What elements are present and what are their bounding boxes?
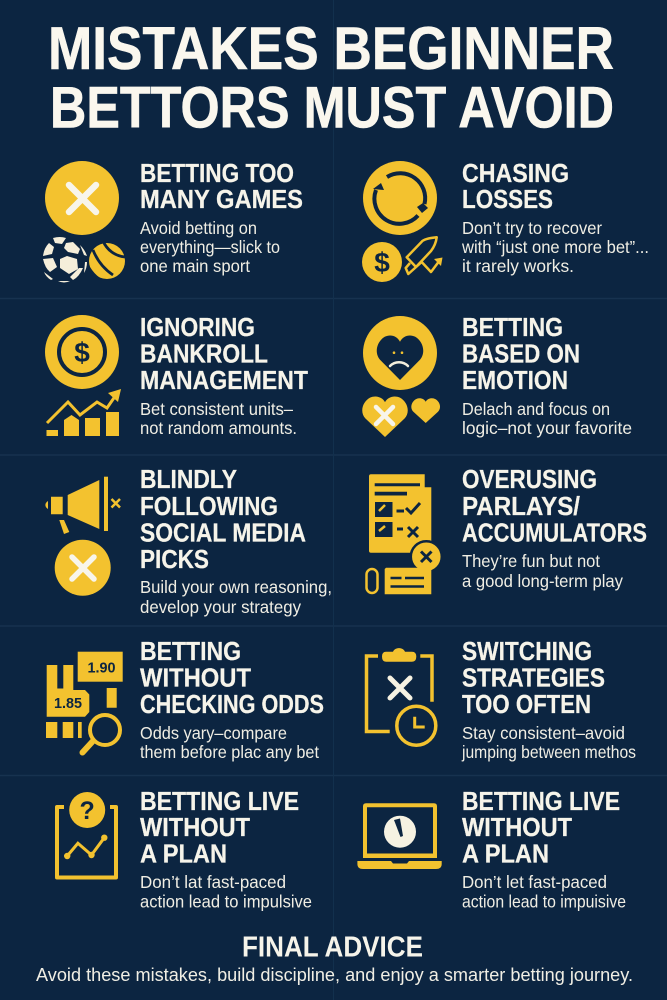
title — [48, 15, 614, 140]
heading: LOSSES — [462, 184, 553, 214]
heading — [462, 464, 647, 548]
description: Bet consistent units– — [140, 399, 293, 419]
panel: betting live without a plan (right) — [357, 786, 626, 912]
description: Build your own reasoning, — [140, 577, 332, 597]
description — [461, 218, 649, 276]
panel: betting without checking odds — [46, 636, 324, 762]
final advice heading: FINAL ADVICE — [242, 932, 423, 964]
heading: MANY GAMES — [140, 184, 303, 214]
panel: betting based on emotion — [362, 312, 632, 438]
description: jumping between methos — [461, 742, 636, 762]
icon: dollar coin with rising chart — [45, 315, 121, 436]
description: They’re fun but not — [462, 551, 600, 571]
heading: CHASING — [462, 158, 569, 188]
icon: X circle with sports balls — [43, 161, 125, 282]
description: logic–not your favorite — [462, 418, 632, 438]
heading: BLINDLY — [140, 464, 237, 494]
heading — [140, 312, 308, 395]
description — [140, 723, 319, 762]
heading: FOLLOWING — [140, 491, 278, 521]
description: a good long-term play — [462, 571, 623, 591]
heading: EMOTION — [462, 365, 568, 395]
heading — [462, 158, 569, 214]
heading: BANKROLL — [140, 338, 268, 368]
description: one main sport — [140, 256, 250, 276]
description: everything—slick to — [140, 237, 280, 257]
heading: BETTING — [462, 312, 563, 342]
icon: clipboard with question mark and trend line — [57, 792, 116, 878]
description — [140, 577, 332, 617]
heading: BETTING LIVE — [462, 786, 620, 816]
description: develop your strategy — [140, 597, 301, 617]
heading: TOO OFTEN — [462, 689, 591, 719]
heading: BETTING TOO — [140, 158, 294, 188]
heading: A PLAN — [462, 838, 549, 868]
heading — [140, 636, 324, 719]
heading — [462, 636, 605, 719]
heading — [140, 464, 306, 574]
heading: SWITCHING — [462, 636, 592, 666]
description: Stay consistent–avoid — [462, 723, 625, 743]
heading: A PLAN — [140, 838, 227, 868]
heading: BASED ON — [462, 338, 580, 368]
final advice text: Avoid these mistakes, build discipline, and enjoy a smarter betting journey. — [36, 965, 633, 985]
heading: WITHOUT — [462, 812, 572, 842]
heading: BETTING LIVE — [140, 786, 299, 816]
description — [140, 218, 280, 276]
heading: SOCIAL MEDIA — [140, 518, 306, 548]
description — [140, 872, 312, 912]
heading: CHECKING ODDS — [140, 689, 324, 719]
heading: PICKS — [140, 544, 209, 574]
description: Avoid betting on — [140, 218, 257, 238]
icon: clipboard with clock — [366, 648, 436, 745]
heading: STRATEGIES — [462, 662, 605, 692]
description: not random amounts. — [140, 418, 297, 438]
description: action lead to impulsive — [140, 892, 312, 912]
icon: laptop with clock — [357, 803, 442, 869]
panel: betting live without a plan (left) — [57, 786, 312, 912]
description — [461, 723, 636, 762]
heading: MANAGEMENT — [140, 365, 308, 395]
icon: dollar coin with rising chart: $ — [74, 337, 90, 368]
final advice — [36, 932, 633, 985]
description: them before plac any bet — [140, 742, 319, 762]
panel: ignoring bankroll management — [45, 312, 308, 438]
heading: BETTING — [140, 636, 241, 666]
icon: circular arrows with dollar coin and arrow — [362, 161, 442, 282]
heading — [462, 786, 620, 868]
panel: chasing losses — [362, 158, 649, 282]
heading — [462, 312, 580, 395]
panel: overusing parlays/accumulators — [366, 464, 647, 594]
heading — [140, 786, 299, 868]
description: Delach and focus on — [462, 399, 610, 419]
icon: odds tickets with magnifier — [46, 652, 123, 752]
description — [140, 399, 297, 438]
heading: PARLAYS/ — [462, 491, 580, 521]
description: Don’t try to recover — [462, 218, 602, 238]
icon: odds tickets with magnifier: 1.90 — [88, 660, 116, 676]
description: Don’t lat fast-paced — [140, 872, 286, 892]
description: action lead to impuisive — [462, 892, 626, 912]
panel: betting too many games — [43, 158, 303, 282]
icon: odds tickets with magnifier: 1.85 — [54, 696, 82, 712]
heading: OVERUSING — [462, 464, 597, 494]
description: with “just one more bet”... — [461, 237, 649, 257]
panel: blindly following social media picks — [45, 464, 332, 617]
description — [462, 551, 623, 591]
icon: clipboard with question mark and trend line: ? — [80, 797, 95, 825]
panel: switching strategies too often — [366, 636, 636, 762]
description: it rarely works. — [462, 256, 574, 276]
heading — [140, 158, 303, 214]
icon: bet slip checklist — [366, 474, 442, 594]
heading: WITHOUT — [140, 812, 250, 842]
description: Odds yary–compare — [140, 723, 287, 743]
icon: sad heart with hearts — [362, 316, 440, 437]
description — [462, 872, 626, 912]
description: Don’t let fast-paced — [462, 872, 607, 892]
description — [462, 399, 632, 438]
icon: megaphone with X circle — [45, 477, 120, 596]
icon: circular arrows with dollar coin and arrow: $ — [374, 247, 390, 278]
heading: WITHOUT — [140, 662, 251, 692]
heading: IGNORING — [140, 312, 255, 342]
